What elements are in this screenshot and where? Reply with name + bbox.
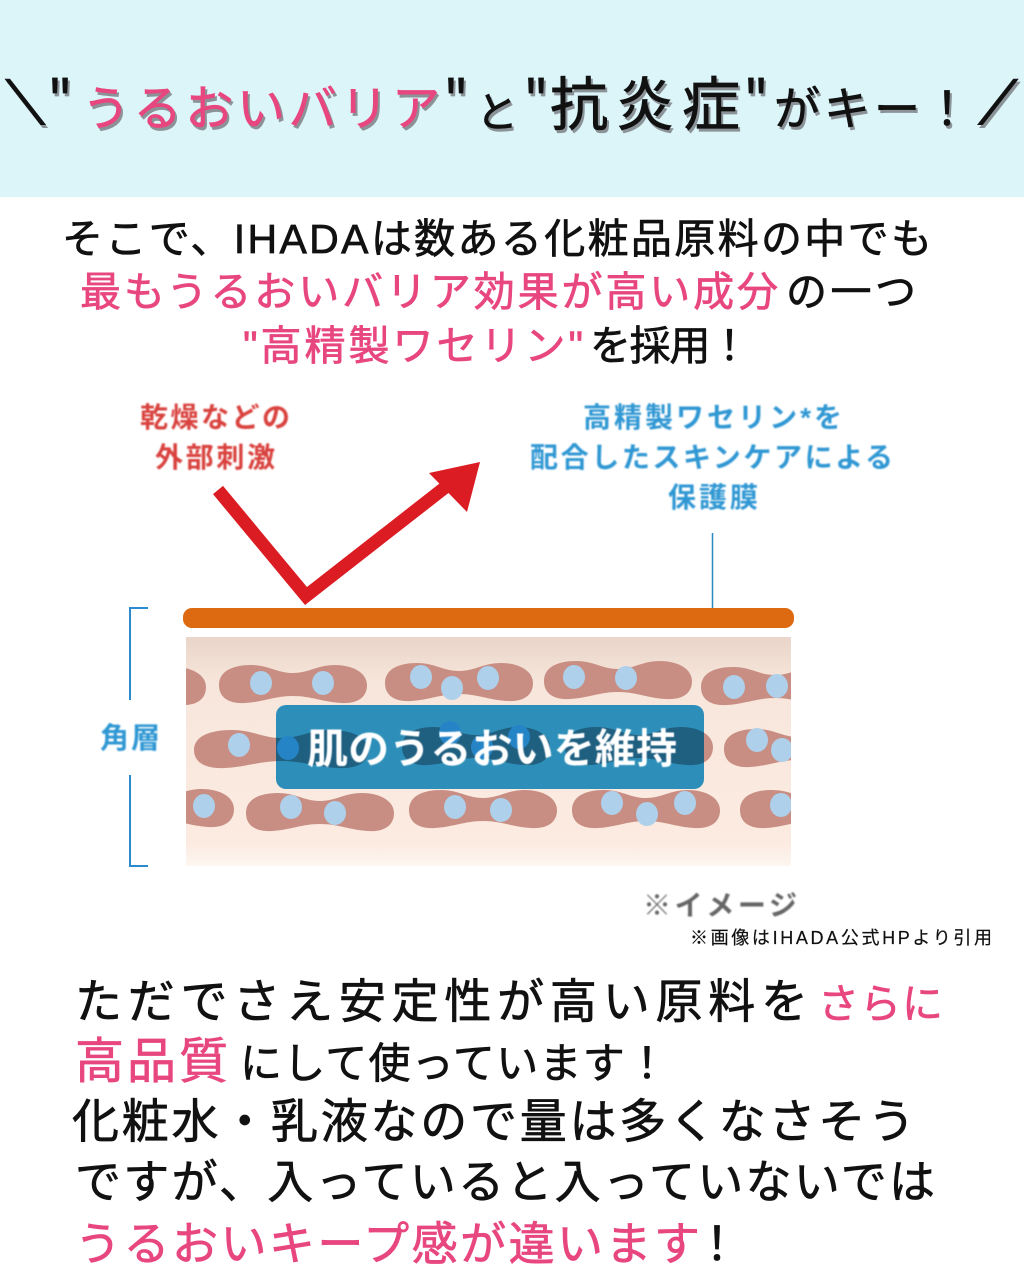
label: external stimulus	[140, 402, 290, 473]
body text: ！	[694, 1218, 740, 1270]
caption panel: 肌のうるおいを維持	[307, 726, 677, 772]
label: external stimulus: 乾燥などの	[140, 402, 290, 433]
title: "	[746, 63, 766, 141]
caption panel	[276, 705, 704, 789]
title: "	[50, 63, 70, 141]
intro text	[62, 216, 932, 369]
title: "	[526, 63, 546, 141]
label: protective film	[530, 402, 893, 513]
corneocyte cells	[186, 661, 791, 832]
label: protective film: 高精製ワセリン*を	[583, 402, 842, 433]
intro text: を採用！	[590, 323, 750, 369]
arrow: reflected stimulus	[218, 462, 480, 596]
bracket	[130, 608, 148, 866]
skin layer	[186, 637, 791, 866]
water droplets	[193, 665, 793, 826]
body text: 化粧水・乳液なので量は多くなさそう	[72, 1095, 915, 1148]
intro text: の一つ	[786, 269, 916, 315]
label: protective film: 保護膜	[668, 482, 758, 513]
diagram	[58, 402, 893, 866]
title: "	[446, 63, 466, 141]
label: stratum corneum: 角層	[100, 722, 160, 755]
body text: ただでさえ安定性が高い原料を	[75, 975, 808, 1028]
title: がキー！	[774, 83, 970, 135]
body text: 高品質	[75, 1035, 228, 1089]
title: うるおいバリア	[82, 83, 440, 136]
image note: ※イメージ	[643, 890, 797, 921]
intro text: 最もうるおいバリア効果が高い成分	[80, 269, 778, 315]
intro text: そこで、IHADAは数ある化粧品原料の中でも	[62, 216, 932, 262]
label: protective film: 配合したスキンケアによる	[530, 442, 893, 473]
title: /	[971, 68, 1024, 137]
body text: さらに	[818, 981, 943, 1027]
protective film bar	[183, 608, 794, 628]
label: external stimulus: 外部刺激	[155, 442, 275, 473]
header band	[0, 0, 1024, 197]
intro text: "高精製ワセリン"	[243, 323, 583, 369]
source note: ※画像はIHADA公式HPより引用	[690, 928, 992, 948]
leader line	[712, 533, 714, 609]
body text: うるおいキープ感が違います	[75, 1218, 700, 1270]
body text: ですが、入っていると入っていないでは	[75, 1156, 935, 1208]
body text	[72, 975, 943, 1270]
title: 抗炎症	[550, 73, 740, 138]
title: \	[0, 68, 53, 137]
title: と	[476, 89, 518, 136]
body text: にして使っています！	[240, 1040, 668, 1087]
title	[0, 63, 1024, 141]
